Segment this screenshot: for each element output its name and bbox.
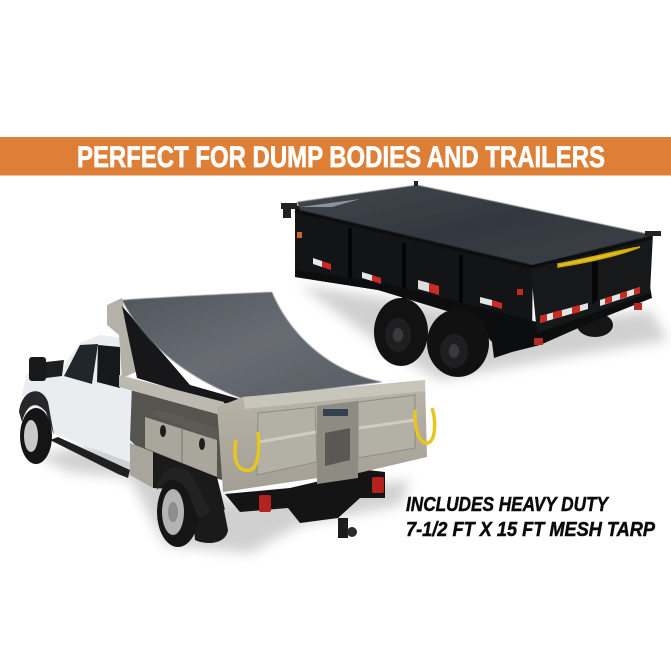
toolbox: [145, 410, 217, 477]
top rail: [295, 211, 652, 267]
frame below bed rail: [130, 385, 222, 480]
trailer wheel 1: [374, 298, 428, 366]
dark underside: [153, 452, 225, 510]
cab windows: [64, 344, 98, 384]
front fender arch: [19, 391, 54, 435]
yellow strap left: [235, 432, 259, 470]
rear wall centre post: [592, 250, 598, 305]
chassis and hitch: [225, 470, 385, 523]
hidden rear wheel: [577, 313, 613, 337]
truck ground shadow: [35, 440, 410, 553]
tarp size callout: INCLUDES HEAVY DUTY: [406, 494, 609, 516]
tarp on truck: [122, 292, 383, 399]
tail lights: [259, 495, 271, 512]
side reflectors: [297, 232, 523, 309]
headache rack: [107, 298, 136, 378]
trailer rear wall: [530, 233, 653, 333]
yellow bungee cord: [558, 247, 640, 267]
front wheel: [20, 408, 52, 464]
bed interior: [122, 306, 243, 404]
trailer ground shadow: [300, 285, 668, 380]
rear mudguard: [157, 467, 210, 518]
trailer side ribs: [348, 228, 463, 315]
tailgate body: [217, 380, 427, 492]
tailgate panels: [257, 395, 415, 475]
trailer side wall: [295, 205, 533, 333]
bed side rail: [119, 375, 224, 416]
tarp on trailer: [297, 185, 653, 265]
front roller hardware: [281, 181, 661, 236]
tailgate ribs: [259, 420, 415, 442]
tailgate centre plate: [317, 401, 358, 484]
hitch tip: [347, 527, 357, 537]
dump truck with tarp: [19, 292, 435, 553]
lower toolbox: [130, 443, 153, 488]
tarp highlight: [300, 199, 360, 207]
hood trim: [46, 360, 64, 378]
truck cab body: [22, 335, 132, 463]
orange banner: [0, 137, 671, 176]
rear wheel: [157, 475, 228, 547]
yellow strap right: [415, 408, 435, 443]
side mirror: [29, 357, 46, 381]
ball hitch: [338, 518, 348, 538]
dump trailer with tarp: [281, 181, 668, 380]
trailer wheel 2: [427, 309, 489, 377]
nameplate: [323, 409, 348, 416]
latch hardware: [325, 428, 350, 466]
running board: [50, 437, 130, 478]
trailer fender and frame: [295, 270, 652, 358]
rear reflectors: [534, 287, 642, 345]
tarp size callout: [406, 494, 656, 541]
tailgate top rail: [243, 380, 425, 409]
